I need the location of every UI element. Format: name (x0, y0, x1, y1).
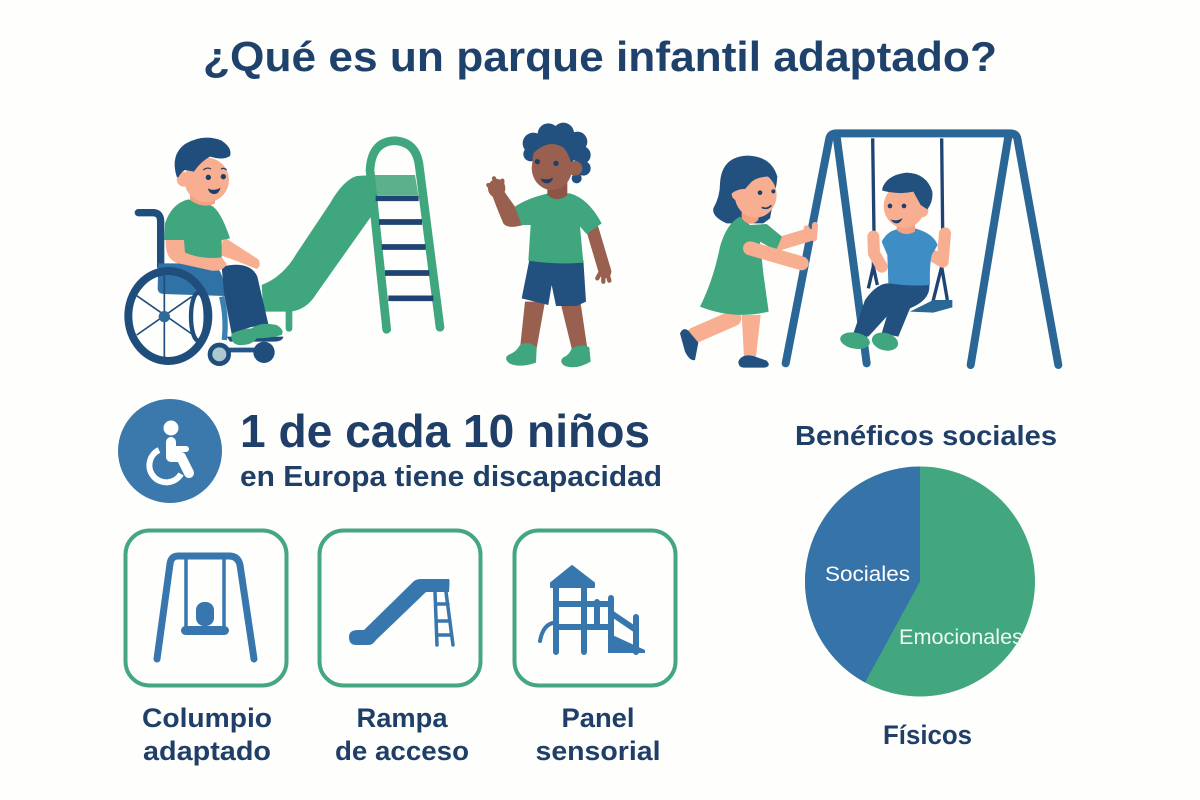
label: access ramp: Rampa (356, 703, 448, 733)
card: sensory panel (514, 530, 676, 686)
icon: accessibility badge (118, 399, 222, 503)
statistic subtext: en Europa tiene discapacidad (240, 461, 662, 493)
illustration: boy in wheelchair beside slide (128, 138, 440, 364)
arms (488, 178, 609, 282)
illustration: waving child (488, 123, 609, 367)
statistic headline: 1 de cada 10 niños (240, 405, 650, 457)
label: adapted swing: adaptado (143, 736, 271, 766)
card: access ramp (320, 530, 480, 686)
pie chart (805, 466, 1035, 696)
label: access ramp: de acceso (335, 736, 469, 766)
chart heading: Benéficos sociales (795, 420, 1057, 451)
chart footer label: Físicos (883, 720, 972, 750)
shorts (522, 260, 586, 306)
label: access ramp (335, 703, 469, 766)
boy figure (164, 138, 283, 345)
label: sensory panel (536, 703, 660, 766)
card: adapted swing (126, 530, 286, 686)
icon: slide (349, 579, 453, 645)
label: adapted swing: Columpio (142, 703, 272, 733)
wheelchair (128, 213, 283, 364)
shirt (515, 193, 602, 263)
pie label: sociales: Sociales (825, 563, 910, 586)
illustration: girl pushing boy on swing (680, 133, 1058, 368)
head (523, 123, 591, 199)
pie label: emocionales: Emocionales (899, 626, 1023, 649)
swing ropes and seat (868, 138, 952, 313)
label: adapted swing (142, 703, 272, 766)
label: sensory panel: Panel (562, 703, 634, 733)
slide (262, 141, 440, 332)
seated boy (839, 173, 945, 353)
label: sensory panel: sensorial (536, 736, 660, 766)
pushing girl (680, 156, 815, 368)
icon: play tower (540, 566, 645, 653)
legs and shoes (506, 302, 591, 367)
swing frame (786, 133, 1058, 365)
title: ¿Qué es un parque infantil adaptado? (203, 33, 997, 80)
icon: swing (157, 556, 254, 659)
